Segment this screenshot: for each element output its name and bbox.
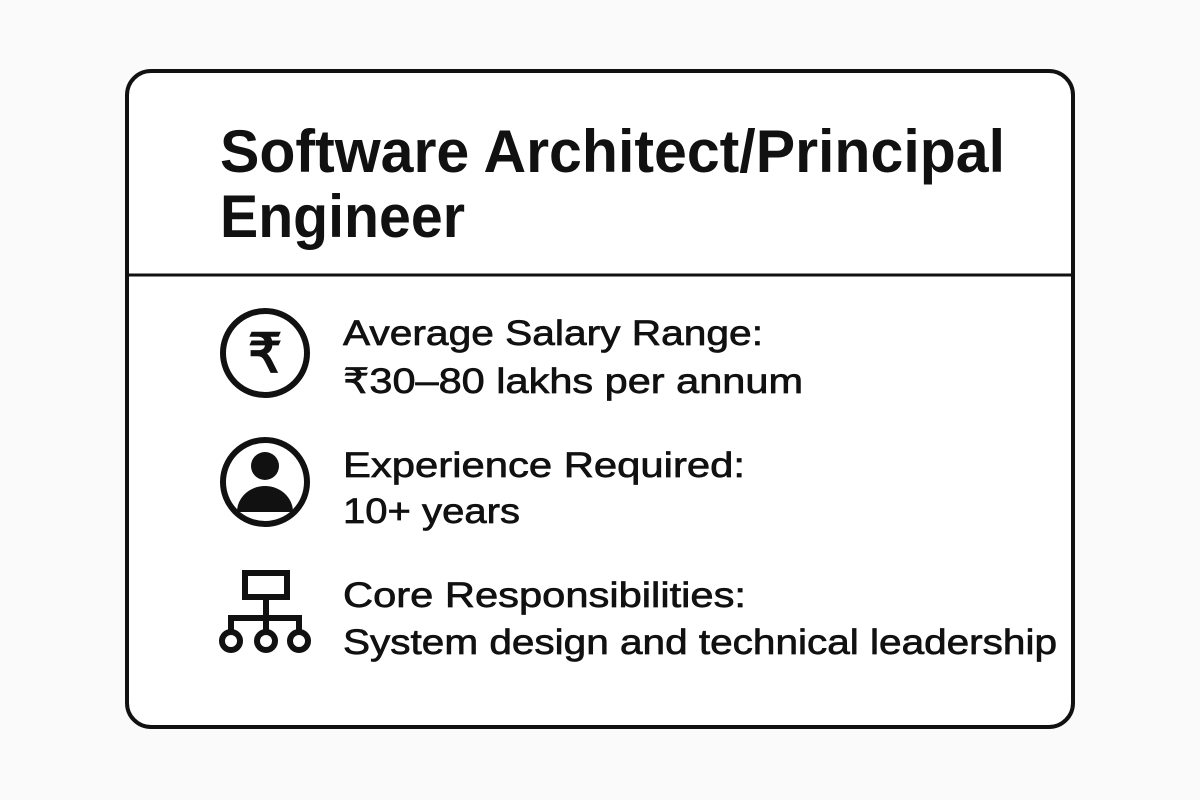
title bbox=[220, 118, 1005, 250]
icon: hierarchy bbox=[222, 573, 308, 650]
text block: responsibilities: System design and technical leadership bbox=[343, 623, 1057, 662]
icon: person bbox=[223, 440, 307, 524]
text block: experience: 10+ years bbox=[343, 492, 520, 531]
text block: salary: Average Salary Range: bbox=[343, 314, 763, 353]
text block: experience bbox=[343, 446, 745, 531]
text block: experience: Experience Required: bbox=[343, 446, 745, 485]
card panel bbox=[127, 71, 1073, 727]
icon: rupee: ₹ bbox=[248, 324, 282, 384]
title: Engineer bbox=[220, 183, 465, 250]
title: Software Architect/Principal bbox=[220, 118, 1005, 185]
text block: responsibilities: Core Responsibilities: bbox=[343, 576, 746, 615]
text block: responsibilities bbox=[343, 576, 1057, 662]
icon: rupee bbox=[223, 311, 307, 395]
text block: salary bbox=[343, 314, 803, 401]
text block: salary: ₹30–80 lakhs per annum bbox=[343, 362, 803, 401]
